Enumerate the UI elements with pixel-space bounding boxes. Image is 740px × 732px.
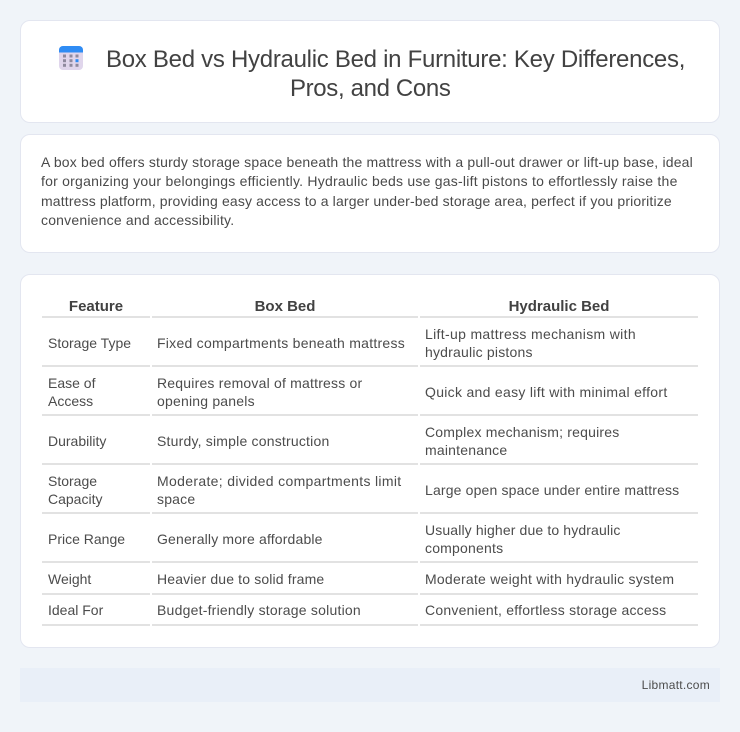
row lines	[42, 316, 698, 626]
row: storage type	[48, 326, 636, 360]
row: storage type: hydraulic pistons	[425, 344, 533, 360]
row: durability: Complex mechanism; requires	[425, 424, 619, 440]
row: storage capacity: space	[157, 491, 195, 507]
row: ease of access: Access	[48, 393, 93, 409]
title: Box Bed vs Hydraulic Bed in Furniture: Key Differences,	[106, 46, 685, 73]
row: storage capacity: Large open space under entire mattress	[425, 482, 679, 498]
header: box bed: Box Bed	[255, 298, 315, 315]
intro text: convenience and accessibility.	[41, 212, 234, 228]
row: ease of access: Ease of	[48, 375, 95, 391]
row: price range: Generally more affordable	[157, 531, 323, 547]
icon: calendar	[59, 46, 83, 70]
row: durability: Sturdy, simple construction	[157, 433, 329, 449]
row: weight: Weight	[48, 571, 91, 587]
row: storage capacity: Moderate; divided compartments limit	[157, 473, 402, 489]
row: ideal for: Budget-friendly storage solution	[157, 602, 361, 618]
row: ease of access	[48, 375, 668, 409]
row: storage capacity	[48, 473, 679, 507]
title	[106, 46, 685, 102]
footer text: Libmatt.com	[642, 678, 710, 692]
row: weight: Moderate weight with hydraulic system	[425, 571, 674, 587]
header: hydraulic bed: Hydraulic Bed	[509, 298, 609, 315]
row: storage type: Fixed compartments beneath mattress	[157, 335, 405, 351]
row: weight: Heavier due to solid frame	[157, 571, 324, 587]
row: ease of access: Quick and easy lift with minimal effort	[425, 384, 668, 400]
row: storage capacity: Storage	[48, 473, 97, 489]
row: price range: components	[425, 540, 503, 556]
row: ideal for: Convenient, effortless storage access	[425, 602, 666, 618]
intro text: for organizing your belongings efficiently. Hydraulic beds use gas-lift pistons to effortlessly raise the	[41, 173, 678, 189]
row: durability: Durability	[48, 433, 106, 449]
row: ideal for	[48, 602, 666, 618]
panel: comparison table	[20, 274, 720, 648]
panel: intro	[20, 134, 720, 253]
row: price range: Usually higher due to hydraulic	[425, 522, 620, 538]
intro text: mattress platform, providing easy access to a larger under-bed storage area, perfect if you prioritize	[41, 192, 672, 208]
row: storage type: Lift-up mattress mechanism with	[425, 326, 636, 342]
header: feature: Feature	[69, 298, 123, 315]
table header	[69, 298, 609, 315]
panel: header	[20, 20, 720, 123]
row: storage capacity: Capacity	[48, 491, 102, 507]
intro text	[41, 154, 693, 228]
row: price range	[48, 522, 620, 556]
row: storage type: Storage Type	[48, 335, 131, 351]
title: Pros, and Cons	[290, 75, 451, 102]
intro text: A box bed offers sturdy storage space beneath the mattress with a pull-out drawer or lift-up base, ideal	[41, 154, 693, 170]
row: ideal for: Ideal For	[48, 602, 103, 618]
footer	[20, 668, 720, 702]
row: price range: Price Range	[48, 531, 125, 547]
row: ease of access: Requires removal of mattress or	[157, 375, 362, 391]
row: weight	[48, 571, 674, 587]
row: durability: maintenance	[425, 442, 507, 458]
row: ease of access: opening panels	[157, 393, 255, 409]
row: durability	[48, 424, 619, 458]
